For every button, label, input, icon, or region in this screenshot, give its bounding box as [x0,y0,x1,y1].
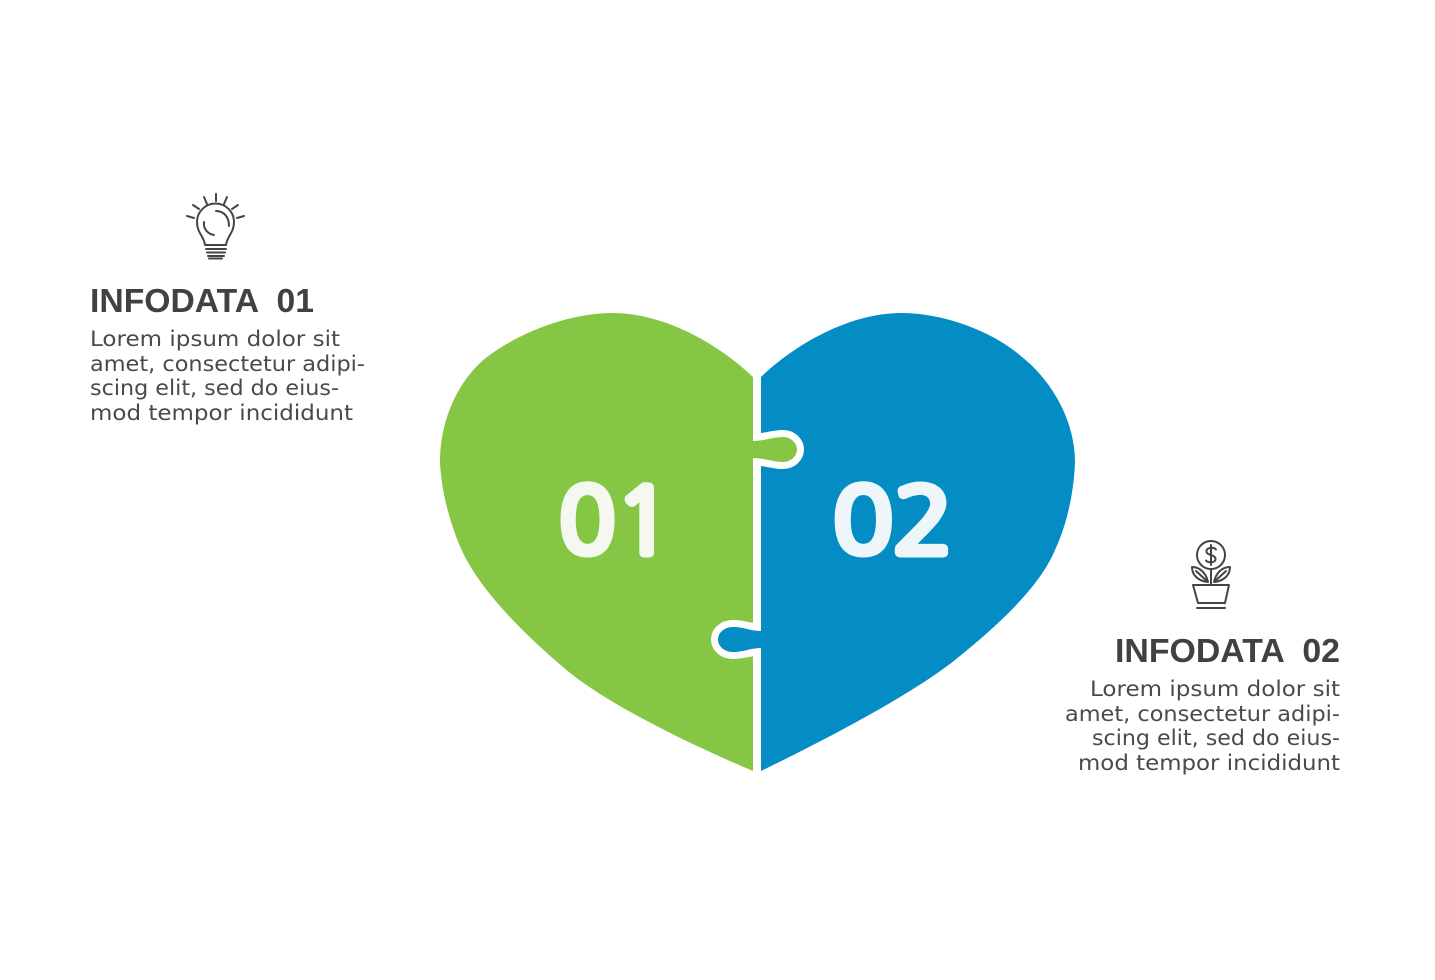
icon: money plant [1192,541,1230,608]
blue tab [718,627,762,652]
green tab outline [748,437,797,462]
body 01: scing elit, sed do eius- [90,376,339,400]
body 02: amet, consectetur adipi- [1065,702,1340,726]
body 02: mod tempor incididunt [1078,751,1340,775]
icon: light bulb [187,194,244,258]
number 02: 02 [833,476,953,566]
heart puzzle [440,313,1075,771]
body 02: scing elit, sed do eius- [1092,726,1340,750]
text block: infodata 01 [90,282,365,425]
heading 02: INFODATA 02 [1115,632,1340,669]
body 01: mod tempor incididunt [90,401,353,425]
text block: infodata 02 [1065,632,1340,775]
puzzle piece: green left half [440,313,753,771]
body 02: Lorem ipsum dolor sit [1090,677,1340,701]
green tab [752,437,797,462]
body 02 [1065,677,1340,775]
puzzle piece: blue right half [761,313,1075,771]
blue tab outline [718,627,766,652]
body 01 [90,327,365,425]
number 01: 01 [559,476,672,566]
heading 01: INFODATA 01 [90,282,314,319]
body 01: Lorem ipsum dolor sit [90,327,340,351]
body 01: amet, consectetur adipi- [90,352,365,376]
